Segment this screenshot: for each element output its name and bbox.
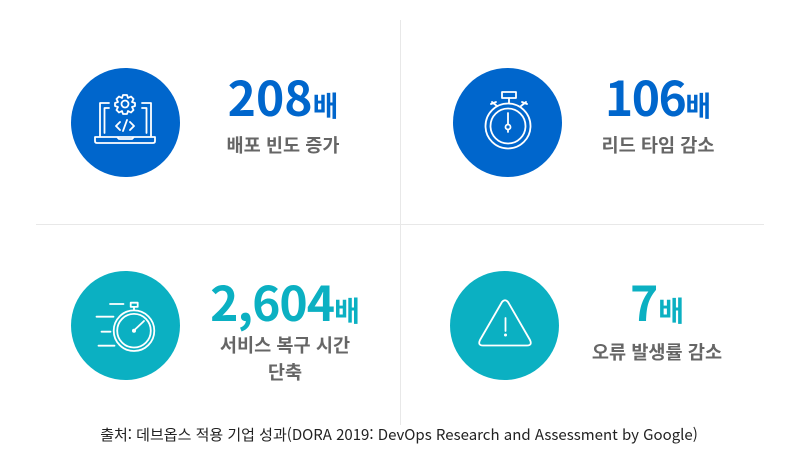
icon: stopwatch — [453, 68, 562, 177]
stat: 7x: 7배 — [630, 265, 684, 335]
icon: fast stopwatch — [71, 271, 180, 380]
source note: 출처: 데브옵스 적용 기업 성과(DORA 2019: DevOps Research and Assessment by Google) — [100, 424, 698, 445]
icon: warning triangle — [450, 271, 559, 380]
label: error rate: 오류 발생률 감소 — [592, 338, 722, 365]
label: deployment frequency: 배포 빈도 증가 — [226, 131, 340, 158]
label: service recovery time: 서비스 복구 시간 — [220, 331, 350, 358]
label: lead time: 리드 타임 감소 — [601, 131, 715, 158]
label: service recovery time — [220, 331, 350, 385]
stat: 106x: 106배 — [605, 60, 711, 130]
stat: 2,604x: 2,604배 — [210, 265, 360, 335]
stat: 208x: 208배 — [228, 60, 338, 130]
icon: laptop with gear — [71, 68, 180, 177]
label: service recovery time: 단축 — [268, 358, 302, 385]
